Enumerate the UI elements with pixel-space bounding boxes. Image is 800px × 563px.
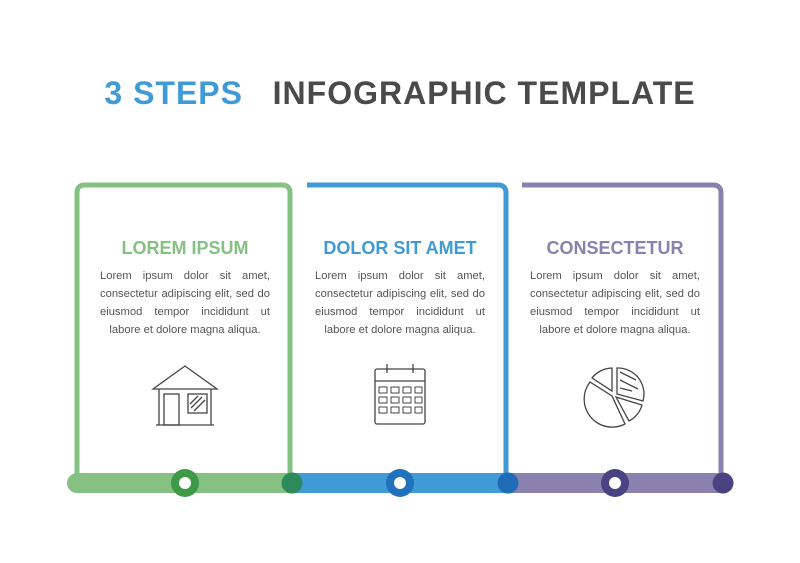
icon: pie chart [584,368,644,427]
timeline bar [67,469,734,497]
icon: house [153,366,217,425]
panel 2 frame [307,185,506,480]
panel 3 text: Lorem ipsum dolor sit amet, consectetur adipiscing elit, sed do eiusmod tempor incididunt ut labore et dolore magna aliqua. [530,270,700,336]
panel 1 heading: LOREM IPSUM [121,238,248,258]
panel 2 text: Lorem ipsum dolor sit amet, consectetur adipiscing elit, sed do eiusmod tempor incididunt ut labore et dolore magna aliqua. [315,270,485,336]
title: 3 STEPS INFOGRAPHIC TEMPLATE [104,75,696,111]
icon: calendar [375,364,425,424]
panel 1 text: Lorem ipsum dolor sit amet, consectetur adipiscing elit, sed do eiusmod tempor incididunt ut labore et dolore magna aliqua. [100,270,270,336]
panel 3 heading: CONSECTETUR [546,238,684,258]
panel 1 frame [77,185,290,480]
panel 3 frame [522,185,721,480]
panel 2 heading: DOLOR SIT AMET [323,238,477,258]
